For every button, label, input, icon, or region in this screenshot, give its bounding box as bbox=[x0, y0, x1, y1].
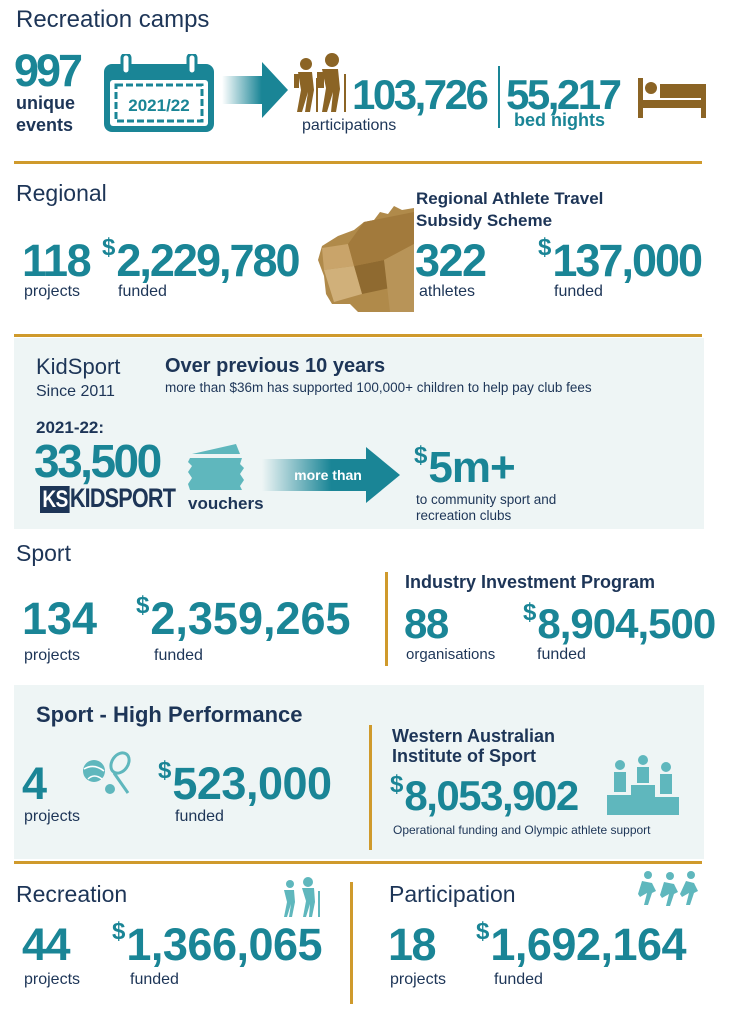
stat: 322 athletes: athletes bbox=[419, 283, 475, 300]
icon: vouchers bbox=[188, 444, 244, 490]
stat: 33,500 kidsport vouchers: vouchers bbox=[188, 494, 264, 513]
stat: 118 projects: projects bbox=[24, 283, 80, 300]
stat: $2,229,780 funded: funded bbox=[118, 283, 167, 300]
heading: regional athlete travel subsidy scheme: Regional Athlete Travel Subsidy Scheme bbox=[416, 189, 603, 230]
stat: 103,726 participations: participations bbox=[302, 117, 396, 134]
heading: recreation: Recreation bbox=[16, 881, 127, 907]
stat: 997 unique events: events bbox=[16, 115, 73, 135]
stat: $1,692,164 funded: $1,692,164 bbox=[476, 918, 686, 970]
stat: $523,000 funded: $523,000 bbox=[158, 757, 332, 809]
icon: hikers bbox=[294, 53, 346, 112]
arrow: more than bbox=[264, 447, 400, 503]
stat: $2,359,265 funded: funded bbox=[154, 647, 203, 664]
heading: WAIS: Western Australian Institute of Sport bbox=[392, 726, 555, 766]
stat: 118 projects: 118 bbox=[22, 235, 90, 286]
stat: $8,053,902 bbox=[390, 771, 650, 837]
icon: podium bbox=[607, 755, 679, 815]
stat: 88 organisations bbox=[404, 600, 495, 663]
stat: $5m+: to community sport and bbox=[416, 492, 556, 507]
icon: hikers small bbox=[284, 877, 320, 917]
stat: 997 unique events: 997 bbox=[14, 45, 80, 96]
stat: $2,229,780 funded: $2,229,780 bbox=[102, 234, 299, 286]
stat: $8,904,500 funded: funded bbox=[537, 646, 586, 663]
stat: 88 organisations: 88 bbox=[404, 600, 448, 647]
icon: balls and racquet bbox=[83, 751, 131, 794]
stat: $1,692,164 funded: funded bbox=[494, 971, 543, 988]
stat: 88 organisations: organisations bbox=[406, 646, 495, 663]
stat: 18 projects: 18 bbox=[388, 919, 435, 970]
icon: calendar 2021/22 bbox=[104, 54, 214, 132]
heading: kidsport since 2011: KidSport bbox=[36, 354, 120, 379]
stat: 44 projects: projects bbox=[24, 971, 80, 988]
text: over previous 10 years: more than $36m has supported 100,000+ children to help pay club fees bbox=[165, 380, 592, 395]
heading: regional: Regional bbox=[16, 180, 107, 206]
stat: 33,500 kidsport vouchers: 33,500 bbox=[34, 435, 160, 487]
stat: 997 unique events bbox=[14, 45, 82, 135]
heading: sport: Sport bbox=[16, 540, 71, 566]
logo: kidsport: KSKIDSPORT bbox=[42, 483, 175, 513]
stat: 4 projects: 4 bbox=[22, 758, 46, 809]
heading: sport - high performance: Sport - High Performance bbox=[36, 702, 302, 727]
stat: 33,500 kidsport vouchers: 2021-22: bbox=[36, 418, 104, 437]
icon: WA map bbox=[318, 206, 414, 312]
panel: kidsport bbox=[14, 338, 704, 529]
arrow: more than: more than bbox=[294, 467, 362, 483]
stat: $137,000 funded: $137,000 bbox=[538, 234, 701, 286]
arrow: gradient bbox=[224, 62, 288, 118]
stat: 33,500 kidsport vouchers bbox=[34, 418, 264, 513]
text: over previous 10 years bbox=[165, 355, 592, 395]
stat: 44 projects bbox=[22, 919, 80, 988]
heading: kidsport since 2011 bbox=[36, 354, 120, 400]
stat: $8,053,902: Operational funding and Olympic athlete support bbox=[393, 823, 650, 837]
heading: recreation camps: Recreation camps bbox=[16, 6, 209, 33]
stat: 103,726 participations: 103,726 bbox=[352, 71, 486, 118]
stat: $8,053,902: $8,053,902 bbox=[390, 771, 578, 819]
stat: $523,000 funded: funded bbox=[175, 808, 224, 825]
heading: participation: Participation bbox=[389, 881, 516, 907]
stat: 44 projects: 44 bbox=[22, 919, 69, 970]
stat: 103,726 participations bbox=[302, 71, 488, 134]
heading: industry investment program: Industry Investment Program bbox=[405, 572, 655, 592]
stat: $8,904,500 funded: $8,904,500 bbox=[523, 599, 715, 647]
stat: 134 projects: projects bbox=[24, 647, 80, 664]
stat: 4 projects bbox=[22, 758, 80, 825]
stat: 18 projects bbox=[388, 919, 446, 988]
icon: calendar 2021/22: 2021/22 bbox=[128, 96, 190, 115]
stat: $1,366,065 funded: $1,366,065 bbox=[112, 918, 322, 970]
stat: $5m+: $5m+ bbox=[414, 442, 515, 492]
stat: 997 unique events: unique bbox=[16, 93, 75, 113]
stat: 55,217 bed nights: bed nights bbox=[514, 110, 605, 130]
stat: $5m+ bbox=[414, 442, 556, 523]
icon: runners bbox=[638, 871, 698, 906]
divider bbox=[498, 66, 500, 128]
stat: 55,217 bed nights: 55,217 bbox=[506, 71, 619, 118]
heading: kidsport since 2011: Since 2011 bbox=[36, 383, 115, 400]
stat: $5m+: recreation clubs bbox=[416, 508, 511, 523]
stat: 4 projects: projects bbox=[24, 808, 80, 825]
stat: $1,366,065 funded: funded bbox=[130, 971, 179, 988]
icon: bed bbox=[638, 78, 706, 118]
stat: 18 projects: projects bbox=[390, 971, 446, 988]
stat: $2,359,265 funded: $2,359,265 bbox=[136, 592, 351, 644]
stat: $137,000 funded: funded bbox=[554, 283, 603, 300]
text: over previous 10 years: Over previous 10 years bbox=[165, 355, 385, 377]
stat: 134 projects: 134 bbox=[22, 593, 97, 644]
panel: sport high performance bbox=[14, 685, 704, 859]
stat: 322 athletes: 322 bbox=[415, 235, 486, 286]
